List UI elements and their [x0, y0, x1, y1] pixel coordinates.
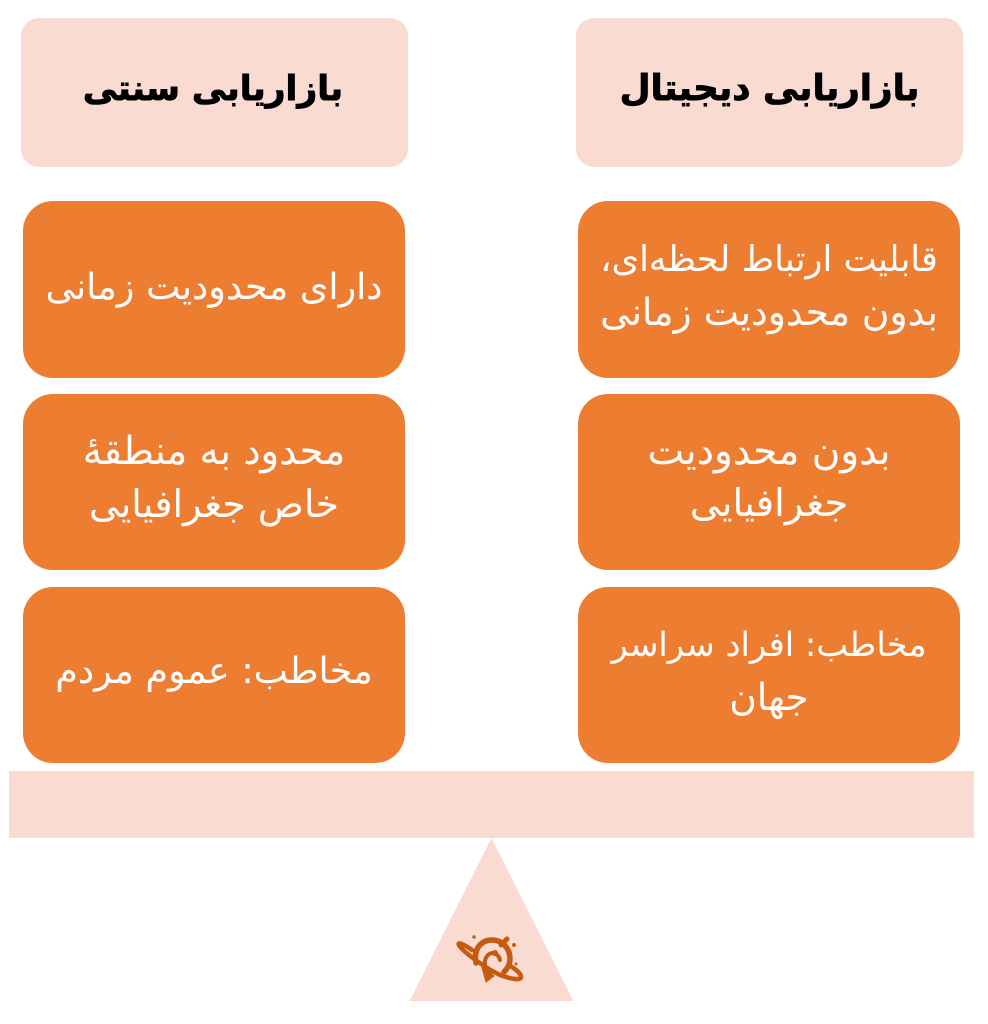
card: digital global audience	[578, 587, 960, 763]
heading panel: digital marketing	[576, 18, 963, 167]
scale fulcrum with logo	[410, 838, 574, 1001]
heading panel: digital marketing: بازاریابی دیجیتال	[620, 68, 919, 109]
icon: planet and rocket logo	[459, 935, 521, 982]
card: traditional time limited: دارای محدودیت زمانی	[46, 265, 382, 308]
card: digital no geographic limit: جغرافیایی	[690, 481, 848, 526]
card: digital no geographic limit	[578, 394, 960, 570]
heading panel: traditional marketing: بازاریابی سنتی	[83, 69, 343, 109]
card: digital global audience: مخاطب: افراد سراسر	[611, 625, 927, 664]
card: traditional geographic limit: خاص جغرافیایی	[89, 482, 339, 526]
card: digital instant communication: قابلیت ارتباط لحظه‌ای،	[600, 239, 938, 280]
card: traditional geographic limit: محدود به منطقۀ	[83, 429, 345, 474]
card: traditional general audience: مخاطب: عموم مردم	[55, 649, 373, 692]
scale beam	[9, 771, 974, 838]
card: digital no geographic limit: بدون محدودیت	[647, 429, 891, 474]
fulcrum triangle	[410, 838, 574, 1001]
card: traditional time limited	[23, 201, 405, 378]
card: traditional general audience	[23, 587, 405, 763]
card: digital global audience: جهان	[729, 675, 809, 719]
heading panel: traditional marketing	[21, 18, 408, 167]
card: digital instant communication: بدون محدودیت زمانی	[600, 290, 938, 334]
card: traditional geographic limit	[23, 394, 405, 570]
card: digital instant communication	[578, 201, 960, 378]
